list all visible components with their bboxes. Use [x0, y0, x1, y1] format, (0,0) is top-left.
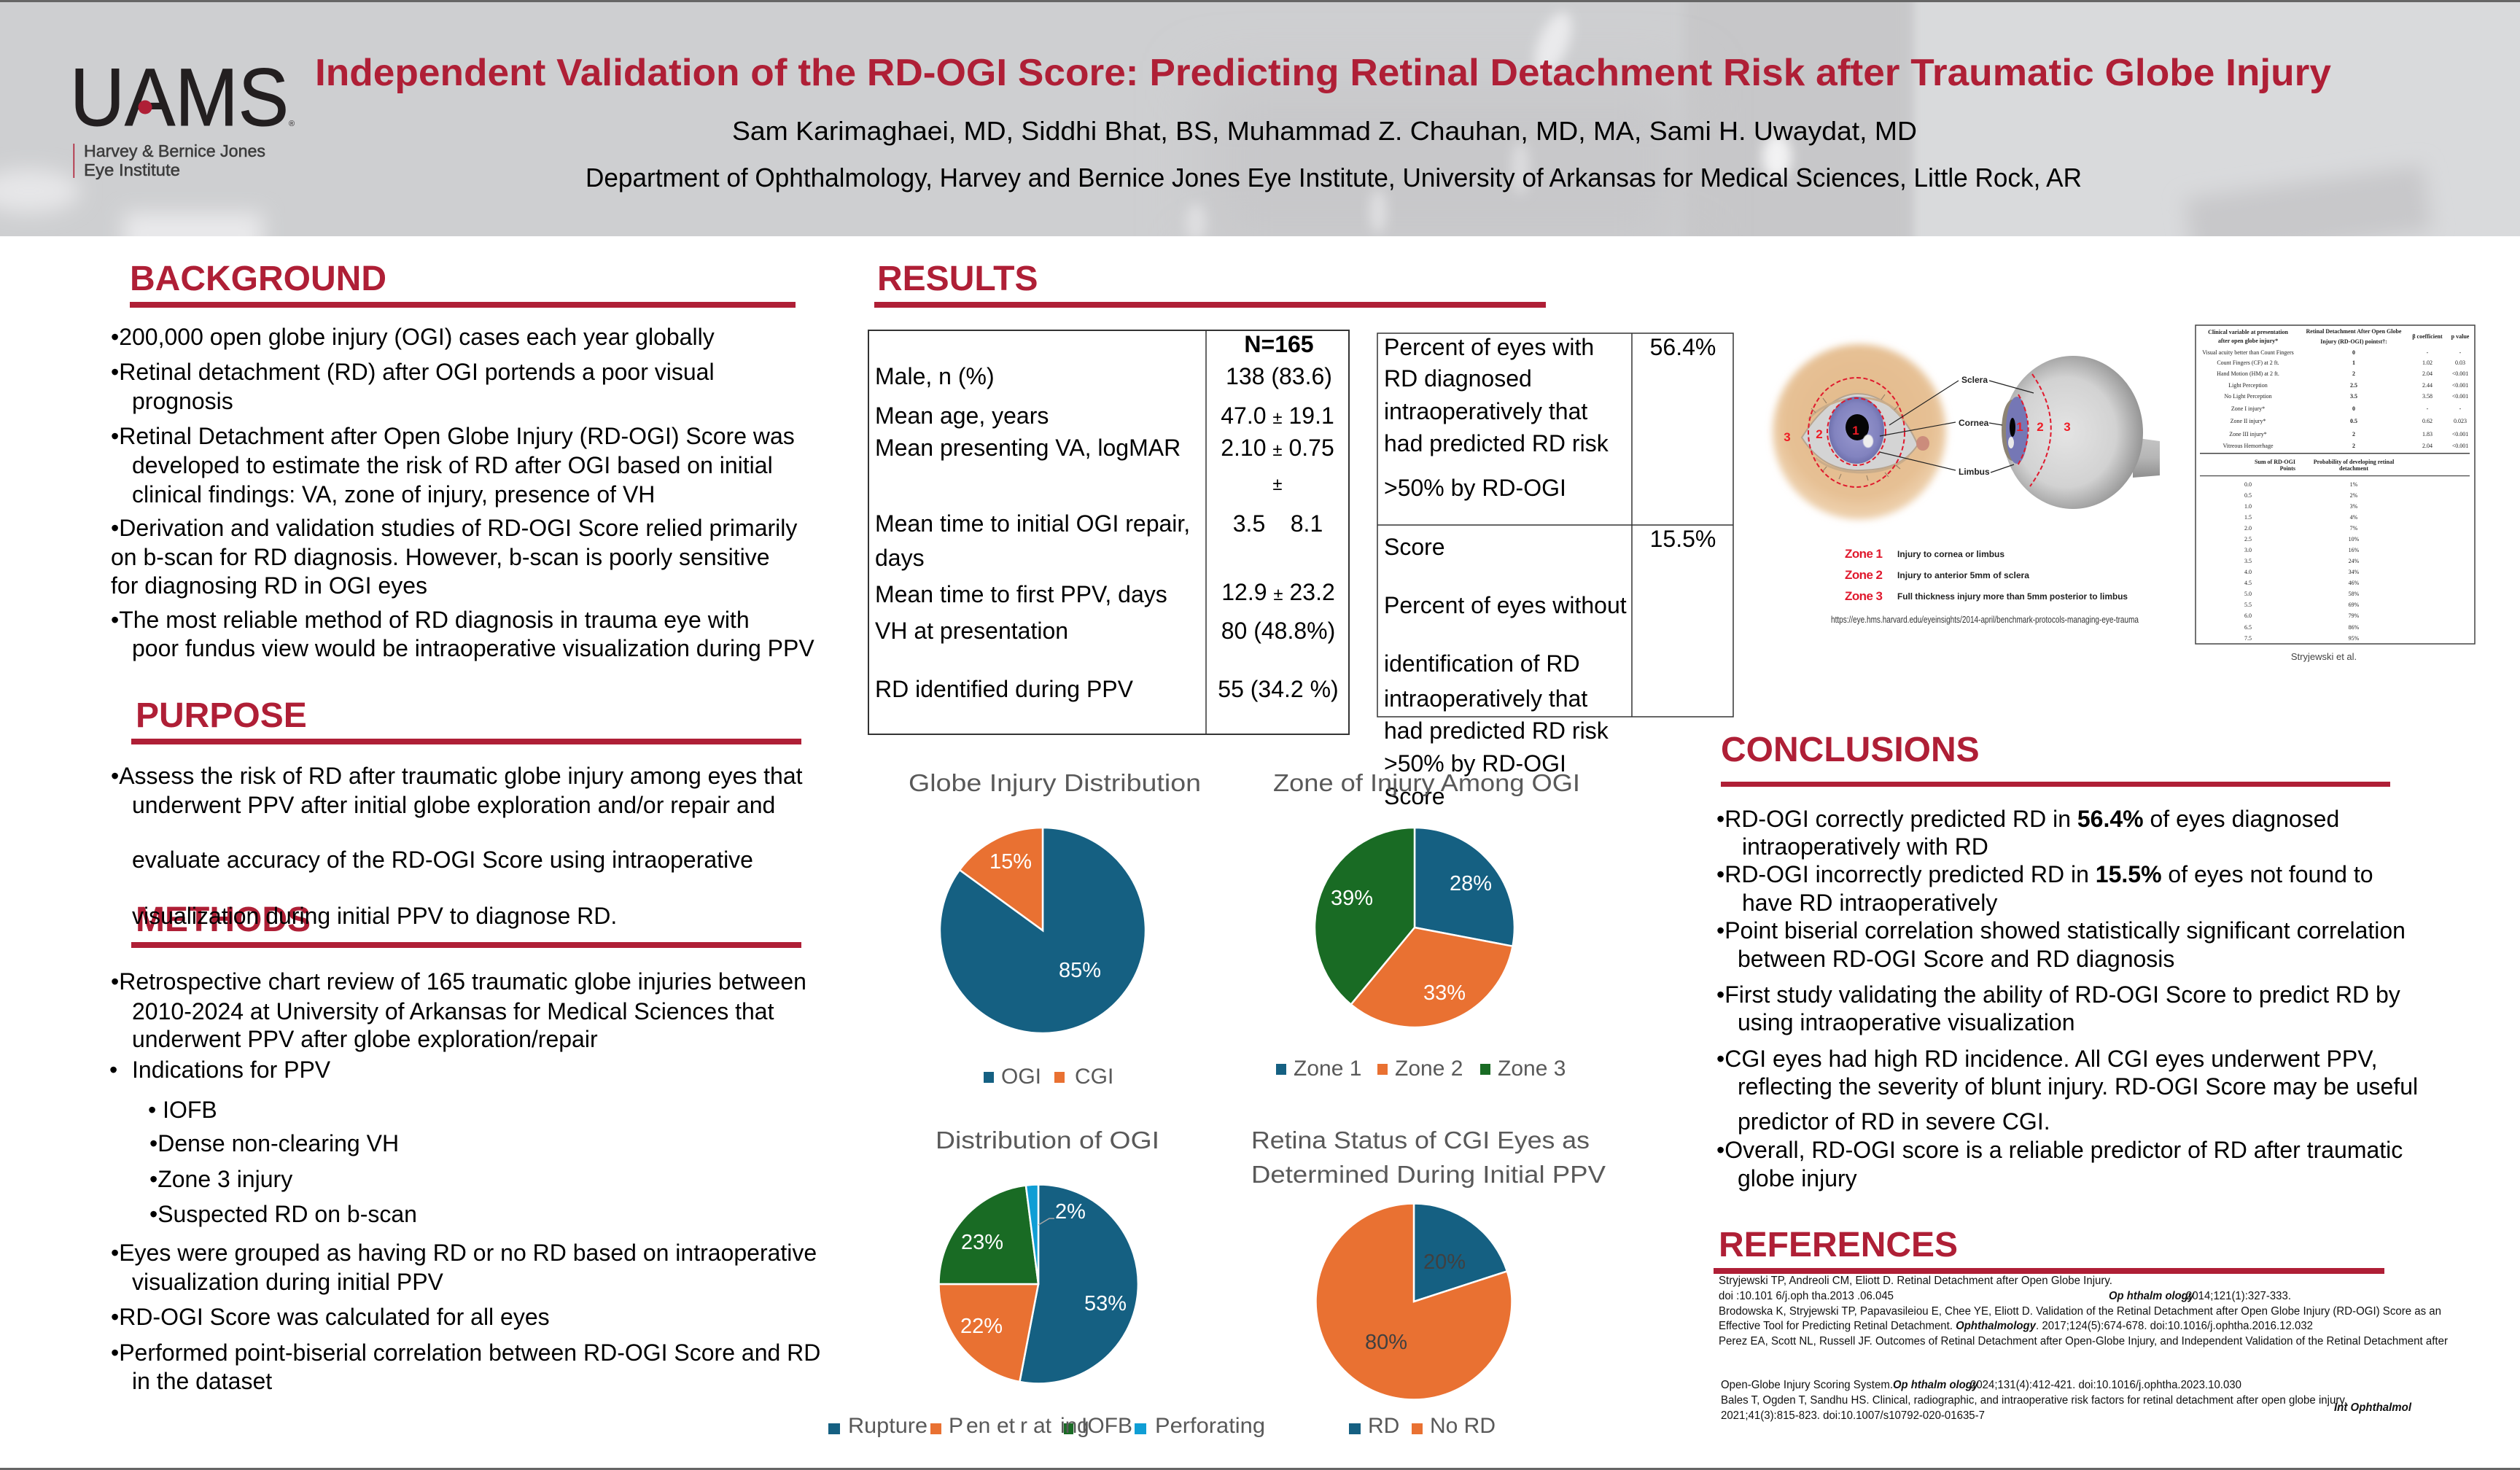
legend: RD — [1368, 1414, 1399, 1438]
table header: after open globe injury* — [2218, 338, 2278, 344]
table header: β coefficient — [2412, 333, 2443, 340]
pie chart: zone of injury: 28% — [1450, 872, 1492, 895]
table rows: probability: 0.0 — [2244, 481, 2252, 488]
pie chart: distribution of OGI: 2% — [1055, 1200, 1086, 1224]
conclusions bullet list: •RD-OGI incorrectly predicted RD in 15.5% of eyes not found to — [1716, 861, 2373, 887]
table rows: probability: 1% — [2350, 481, 2358, 488]
zone legend: Zone 1 — [1845, 547, 1883, 561]
figure: RD-OGI score table — [2196, 325, 2475, 662]
table rows: clinical variables: 3.58 — [2422, 393, 2432, 400]
table rows: probability: 7% — [2350, 525, 2358, 532]
table rows: clinical variables — [2202, 349, 2468, 449]
reference list: 2021;41(3):815-823. doi:10.1007/s10792-020-01635-7 — [1721, 1409, 1985, 1422]
table rows: clinical variables: Vitreous Hemorrhage — [2222, 443, 2274, 449]
heading: references: REFERENCES — [1719, 1226, 1958, 1264]
purpose bullet list — [111, 763, 803, 873]
conclusions bullet list: predictor of RD in severe CGI. — [1738, 1108, 2050, 1135]
heading: background: BACKGROUND — [130, 260, 386, 298]
table: score performance: 15.5% — [1650, 526, 1716, 552]
legend: at — [1033, 1414, 1052, 1438]
table rows: probability: 58% — [2349, 591, 2360, 597]
background bullet list: poor fundus view would be intraoperative visualization during PPV — [132, 635, 814, 661]
pie chart: retina status of CGI eyes: 80% — [1365, 1331, 1407, 1354]
zone legend: Injury to cornea or limbus — [1897, 549, 2004, 559]
purpose bullet list: •Assess the risk of RD after traumatic globe injury among eyes that — [111, 763, 803, 789]
affiliation: Department of Ophthalmology, Harvey and Bernice Jones Eye Institute, University of Arkansas for Medical Sciences, Little Rock, AR — [586, 163, 2082, 192]
table rows: probability: 24% — [2349, 558, 2360, 564]
table rows: probability: 4.5 — [2244, 580, 2252, 586]
table rows: probability: 46% — [2349, 580, 2360, 586]
background bullet list: for diagnosing RD in OGI eyes — [111, 572, 427, 599]
pie chart: zone of injury — [1273, 769, 1580, 1081]
table: patient characteristics: Mean time to initial OGI repair, — [875, 510, 1190, 537]
table header: Clinical variable at presentation — [2208, 329, 2288, 335]
reference list: Op hthalm ology — [2109, 1290, 2195, 1302]
reference list: Op hthalm ology — [1893, 1379, 1979, 1391]
institute name: Harvey & Bernice Jones — [84, 141, 265, 160]
institute name — [84, 141, 265, 179]
legend: en — [966, 1414, 990, 1438]
legend: Zone 2 — [1395, 1057, 1463, 1081]
table: patient characteristics: 47.0 ± 19.1 — [1221, 402, 1334, 429]
table rows: clinical variables: 1.02 — [2422, 359, 2432, 366]
background bullet list: •200,000 open globe injury (OGI) cases each year globally — [111, 324, 715, 350]
table rows: clinical variables: - — [2459, 405, 2462, 412]
table rows: clinical variables: 2.44 — [2422, 382, 2432, 389]
table rows: probability: 2.0 — [2244, 525, 2252, 532]
methods bullet list: underwent PPV after globe exploration/repair — [132, 1026, 598, 1052]
heading: purpose: PURPOSE — [136, 696, 307, 735]
table: score performance: intraoperatively that — [1384, 398, 1587, 424]
chart title: Distribution of OGI — [936, 1127, 1159, 1154]
legend: Perforating — [1155, 1414, 1265, 1438]
panel: results — [874, 260, 1546, 308]
table rows: probability: 4% — [2350, 514, 2358, 521]
pie chart: globe injury distribution — [909, 769, 1201, 1089]
table rows: probability: 6.5 — [2244, 624, 2252, 631]
table rows: probability: 16% — [2349, 547, 2360, 553]
table: patient characteristics: 12.9 ± 23.2 — [1221, 579, 1335, 605]
table rows: clinical variables: Hand Motion (HM) at 2 ft. — [2217, 370, 2279, 377]
chart title: Zone of Injury Among OGI — [1273, 769, 1580, 796]
background bullet list: prognosis — [132, 388, 233, 414]
methods bullet list — [109, 968, 820, 1394]
legend: No RD — [1430, 1414, 1496, 1438]
table rows: clinical variables: 2 — [2352, 443, 2355, 449]
table: patient characteristics: ± — [1272, 475, 1283, 494]
table rows: probability: 4.0 — [2244, 569, 2252, 575]
conclusions bullet list: intraoperatively with RD — [1742, 833, 1988, 860]
panel: purpose — [111, 696, 803, 873]
methods bullet list: 2010-2024 at University of Arkansas for Medical Sciences that — [132, 998, 774, 1024]
anatomy labels and leader lines — [1880, 375, 2034, 477]
table rows: clinical variables: 2 — [2352, 431, 2355, 438]
table: patient characteristics: 80 (48.8%) — [1221, 618, 1335, 644]
reference list — [1719, 1275, 2448, 1422]
table: patient characteristics: VH at presentation — [875, 618, 1068, 644]
pie chart: globe injury distribution: 15% — [989, 850, 1032, 874]
table rows: probability — [2244, 459, 2395, 642]
zone legend — [1845, 547, 2128, 603]
logo red dot — [139, 101, 152, 114]
anatomy labels and leader lines: Cornea — [1959, 418, 1989, 428]
methods bullet list: •RD-OGI Score was calculated for all eyes — [111, 1304, 550, 1330]
conclusions bullet list: between RD-OGI Score and RD diagnosis — [1738, 946, 2174, 972]
reference list: Int Ophthalmol — [2334, 1401, 2412, 1414]
table rows: clinical variables: <0.001 — [2452, 393, 2468, 400]
table rows: clinical variables: - — [2427, 405, 2429, 412]
pie chart: retina status of CGI eyes — [1251, 1127, 1606, 1438]
table rows: probability: Points — [2280, 465, 2295, 472]
chart title — [1251, 1127, 1606, 1188]
table rows: clinical variables: Visual acuity better than Count Fingers — [2202, 349, 2294, 356]
table: patient characteristics: Mean presenting VA, logMAR — [875, 435, 1181, 461]
institute name: Eye Institute — [84, 160, 180, 179]
conclusions bullet list: have RD intraoperatively — [1742, 890, 1997, 916]
table: score performance: intraoperatively that — [1384, 685, 1587, 712]
zone legend: Zone 3 — [1845, 589, 1883, 603]
table rows: clinical variables: 0 — [2352, 349, 2355, 356]
methods bullet list: •Performed point-biserial correlation between RD-OGI Score and RD — [111, 1339, 820, 1366]
table header — [2208, 328, 2470, 345]
table: patient characteristics: 2.10 ± 0.75 — [1221, 435, 1334, 461]
pie chart: distribution of OGI: 22% — [960, 1315, 1003, 1338]
methods bullet list: in the dataset — [132, 1368, 272, 1394]
table rows: clinical variables: Zone I injury* — [2231, 405, 2265, 412]
table rows: clinical variables: 0.03 — [2455, 359, 2465, 366]
table: patient characteristics: Mean time to first PPV, days — [875, 581, 1167, 607]
illustration: front view of eye: 2 — [1816, 427, 1823, 441]
table: patient characteristics: 55 (34.2 %) — [1218, 676, 1339, 702]
zone legend: Zone 2 — [1845, 568, 1883, 582]
table rows: clinical variables: 2 — [2352, 370, 2355, 377]
purpose bullet list: underwent PPV after initial globe exploration and/or repair and — [132, 792, 775, 818]
table: patient characteristics: RD identified during PPV — [875, 676, 1134, 702]
table rows: probability: 79% — [2349, 612, 2360, 619]
table rows: clinical variables: 2.04 — [2422, 443, 2432, 449]
legend: Rupture — [848, 1414, 928, 1438]
table: score performance: Percent of eyes with — [1384, 334, 1594, 360]
illustration: side view of globe: 1 — [2016, 420, 2023, 434]
legend: OGI — [1001, 1065, 1041, 1089]
table rows: probability: 10% — [2349, 536, 2360, 542]
methods bullet list: • IOFB — [148, 1097, 217, 1123]
legend — [828, 1414, 1265, 1438]
illustration: side view of globe: 3 — [2064, 420, 2071, 434]
chart title: Globe Injury Distribution — [909, 769, 1201, 796]
table rows: probability: 3.0 — [2244, 547, 2252, 553]
pie chart: globe injury distribution: 85% — [1059, 959, 1101, 982]
table rows: clinical variables: Zone III injury* — [2229, 431, 2267, 438]
table: patient characteristics: 3.5 — [1233, 510, 1265, 537]
reference list: Bales T, Ogden T, Sandhu HS. Clinical, radiographic, and intraoperative risk factors for retinal detachment after open globe injury. — [1721, 1394, 2347, 1407]
anatomy labels and leader lines: Limbus — [1959, 467, 1990, 477]
logo: UAMS Harvey & Bernice Jones Eye Institute: ® — [289, 120, 295, 128]
table rows: clinical variables: 0.62 — [2422, 418, 2432, 424]
legend — [1276, 1057, 1566, 1081]
legend: IOFB — [1081, 1414, 1132, 1438]
table rows: clinical variables: 1 — [2352, 359, 2355, 366]
pie chart: zone of injury: 39% — [1331, 887, 1373, 910]
table rows: clinical variables: 2.04 — [2422, 370, 2432, 377]
table: patient characteristics — [868, 330, 1349, 734]
pie chart: distribution of OGI: 53% — [1084, 1292, 1127, 1315]
conclusions bullet list: •Overall, RD-OGI score is a reliable predictor of RD after traumatic — [1716, 1137, 2403, 1163]
panel: references — [1714, 1226, 2448, 1422]
table: patient characteristics: days — [875, 545, 925, 571]
panel: methods — [109, 901, 820, 1394]
figure: ocular injury zones — [1773, 344, 2160, 625]
chart title: Determined During Initial PPV — [1251, 1161, 1606, 1188]
pie chart: zone of injury: 33% — [1423, 981, 1466, 1005]
legend: Zone 1 — [1294, 1057, 1361, 1081]
anatomy labels and leader lines: Sclera — [1961, 375, 1988, 385]
heading: conclusions: CONCLUSIONS — [1721, 731, 1980, 769]
pie slices — [940, 828, 1146, 1033]
table: score performance: Score — [1384, 534, 1445, 560]
table rows: probability: 1.0 — [2244, 503, 2252, 510]
legend: r — [1020, 1414, 1027, 1438]
table: score performance: RD diagnosed — [1384, 365, 1532, 392]
conclusions bullet list: •CGI eyes had high RD incidence. All CGI eyes underwent PPV, — [1716, 1046, 2377, 1072]
table: score performance: had predicted RD risk — [1384, 718, 1609, 744]
legend: g — [1077, 1414, 1089, 1438]
illustration: front view of eye — [1773, 344, 1946, 519]
legend — [984, 1065, 1113, 1089]
table rows: clinical variables: 0 — [2352, 405, 2355, 412]
table: score performance — [1377, 333, 1733, 809]
background bullet list: •Derivation and validation studies of RD-OGI Score relied primarily — [111, 515, 797, 541]
reference list: Perez EA, Scott NL, Russell JF. Outcomes of Retinal Detachment after Open-Globe Injury, and Independent Validation of the Retinal Detachment after — [1719, 1335, 2448, 1348]
table rows: clinical variables: 0.023 — [2454, 418, 2467, 424]
table rows: probability: Sum of RD-OGI — [2255, 459, 2295, 465]
UAMS wordmark: UAMS — [70, 52, 289, 143]
background bullet list — [111, 324, 814, 661]
background bullet list: clinical findings: VA, zone of injury, presence of VH — [132, 481, 655, 508]
pie chart: distribution of OGI — [828, 1127, 1265, 1438]
conclusions bullet list — [1716, 806, 2418, 1191]
table rows: probability: 3.5 — [2244, 558, 2252, 564]
table rows: clinical variables: 3.5 — [2350, 393, 2357, 400]
legend: et — [997, 1414, 1016, 1438]
reference list: Stryjewski TP, Andreoli CM, Eliott D. Retinal Detachment after Open Globe Injury. — [1719, 1275, 2112, 1287]
table rows: clinical variables: <0.001 — [2452, 431, 2468, 438]
table rows: clinical variables: - — [2427, 349, 2429, 356]
table header: p value — [2451, 333, 2470, 340]
table rows: clinical variables: <0.001 — [2452, 443, 2468, 449]
table rows: clinical variables: 0.5 — [2350, 418, 2357, 424]
table rows: probability: 86% — [2349, 624, 2360, 631]
table rows: probability: 95% — [2349, 635, 2360, 642]
table header: Injury (RD-OGI) pointst†: — [2320, 338, 2387, 345]
table rows: clinical variables: No Light Perception — [2224, 393, 2272, 400]
leader line — [1038, 1218, 1054, 1225]
table rows: probability: 69% — [2349, 602, 2360, 608]
pie chart: distribution of OGI: 23% — [961, 1231, 1003, 1254]
panel: methods: visualization during initial PPV to diagnose RD. — [132, 903, 617, 929]
table rows: probability: 34% — [2349, 569, 2360, 575]
table rows: clinical variables: <0.001 — [2452, 382, 2468, 389]
logo red divider — [73, 144, 74, 178]
table rows: probability: 2.5 — [2244, 536, 2252, 542]
authors: Sam Karimaghaei, MD, Siddhi Bhat, BS, Muhammad Z. Chauhan, MD, MA, Sami H. Uwaydat, MD — [732, 116, 1917, 146]
table rows: probability: 5.5 — [2244, 602, 2252, 608]
header banner — [0, 0, 2520, 236]
table rows: probability: 1.5 — [2244, 514, 2252, 521]
table rows: clinical variables: Light Perception — [2228, 382, 2268, 389]
methods bullet list: • — [109, 1057, 117, 1083]
table rows: probability: 0.5 — [2244, 492, 2252, 499]
table header: Retinal Detachment After Open Globe — [2306, 328, 2402, 335]
zone legend: Injury to anterior 5mm of sclera — [1897, 570, 2029, 580]
table rows: probability: 2% — [2350, 492, 2358, 499]
heading: results: RESULTS — [877, 260, 1038, 298]
table rows: clinical variables: - — [2459, 349, 2462, 356]
conclusions bullet list: •RD-OGI correctly predicted RD in 56.4% of eyes diagnosed — [1716, 806, 2339, 832]
methods bullet list: •Zone 3 injury — [149, 1166, 292, 1192]
panel: background — [111, 260, 814, 661]
table rows: clinical variables: Zone II injury* — [2231, 418, 2266, 424]
source caption: Stryjewski et al. — [2291, 651, 2357, 662]
legend — [1349, 1414, 1496, 1438]
logo: UAMS Harvey & Bernice Jones Eye Institute — [70, 52, 295, 179]
reference list: doi :10.101 6/j.oph tha.2013 .06.045 — [1719, 1290, 1894, 1302]
methods bullet list: Indications for PPV — [132, 1057, 331, 1083]
conclusions bullet list: globe injury — [1738, 1165, 1857, 1191]
reference list: Open-Globe Injury Scoring System. — [1721, 1379, 1893, 1391]
table rows: probability: 7.5 — [2244, 635, 2252, 642]
heading: methods: METHODS — [136, 901, 311, 939]
illustration: front view of eye: 1 — [1852, 424, 1859, 438]
purpose bullet list: evaluate accuracy of the RD-OGI Score using intraoperative — [132, 847, 753, 873]
reference list: Effective Tool for Predicting Retinal Detachment. Ophthalmology. 2017;124(5):674-678. doi:10.1016/j.ophtha.2016.12.032 — [1719, 1320, 2313, 1332]
reference list: 2024;131(4):412-421. doi:10.1016/j.ophtha.2023.10.030 — [1970, 1379, 2241, 1391]
pie chart: retina status of CGI eyes: 20% — [1423, 1251, 1466, 1274]
illustration: side view of globe — [2002, 356, 2160, 509]
background bullet list: developed to estimate the risk of RD after OGI based on initial — [132, 452, 773, 478]
background bullet list: •Retinal Detachment after Open Globe Injury (RD-OGI) Score was — [111, 423, 795, 449]
chart title: Retina Status of CGI Eyes as — [1251, 1127, 1590, 1154]
legend: in — [1060, 1414, 1077, 1438]
conclusions bullet list: using intraoperative visualization — [1738, 1009, 2074, 1035]
zone legend: Full thickness injury more than 5mm posterior to limbus — [1897, 591, 2128, 602]
panel: conclusions — [1716, 731, 2418, 1191]
table: score performance: Score — [1384, 783, 1445, 809]
background bullet list: •Retinal detachment (RD) after OGI portends a poor visual — [111, 359, 715, 385]
legend: CGI — [1075, 1065, 1113, 1089]
table rows: probability: 5.0 — [2244, 591, 2252, 597]
pie slices — [1315, 828, 1514, 1027]
background bullet list: on b-scan for RD diagnosis. However, b-scan is poorly sensitive — [111, 544, 770, 570]
table: patient characteristics: Male, n (%) — [875, 363, 995, 389]
table rows: probability: Probability of developing retinal — [2314, 459, 2395, 465]
reference list: Brodowska K, Stryjewski TP, Papavasileiou E, Chee YE, Eliott D. Validation of the Retinal Detachment after Open Globe Injury (RD-OGI) Score as an — [1719, 1305, 2441, 1318]
table rows: clinical variables: Count Fingers (CF) at 2 ft. — [2217, 359, 2279, 366]
illustration: side view of globe: 2 — [2037, 420, 2044, 434]
table rows: probability: detachment — [2339, 465, 2368, 472]
legend: P — [949, 1414, 963, 1438]
background bullet list: •The most reliable method of RD diagnosis in trauma eye with — [111, 607, 750, 633]
methods bullet list: •Retrospective chart review of 165 traumatic globe injuries between — [111, 968, 806, 995]
bottom border — [0, 1468, 2520, 1470]
source url: https://eye.hms.harvard.edu/eyeinsights/2014-april/benchmark-protocols-managing-eye-trauma — [1831, 614, 2139, 625]
reference list: 2014;121(1):327-333. — [2186, 1290, 2291, 1302]
methods bullet list: •Eyes were grouped as having RD or no RD based on intraoperative — [111, 1240, 817, 1266]
methods bullet list: visualization during initial PPV — [132, 1269, 444, 1295]
table: score performance: had predicted RD risk — [1384, 430, 1609, 456]
table: patient characteristics: N=165 — [1244, 331, 1314, 357]
table: patient characteristics: Mean age, years — [875, 402, 1049, 429]
table rows: probability: 6.0 — [2244, 612, 2252, 619]
table: score performance: identification of RD — [1384, 650, 1580, 677]
legend: Zone 3 — [1498, 1057, 1566, 1081]
table: score performance: >50% by RD-OGI — [1384, 750, 1566, 777]
table rows: clinical variables: 1.83 — [2422, 431, 2432, 438]
table: patient characteristics: 8.1 — [1291, 510, 1323, 537]
conclusions bullet list: •Point biserial correlation showed statistically significant correlation — [1716, 917, 2406, 944]
illustration: front view of eye: 3 — [1784, 430, 1791, 444]
methods bullet list: •Dense non-clearing VH — [149, 1130, 399, 1156]
conclusions bullet list: reflecting the severity of blunt injury. RD-OGI Score may be useful — [1738, 1073, 2418, 1100]
table rows: probability: 3% — [2350, 503, 2358, 510]
table: score performance: Percent of eyes without — [1384, 592, 1627, 618]
title: Independent Validation of the RD-OGI Score: Predicting Retinal Detachment Risk after Traumatic Globe Injury — [315, 52, 2331, 94]
table: score performance: 56.4% — [1650, 334, 1716, 360]
table: score performance: >50% by RD-OGI — [1384, 475, 1566, 501]
pie slices — [1315, 1203, 1512, 1400]
pie slices — [939, 1184, 1138, 1383]
methods bullet list: •Suspected RD on b-scan — [149, 1201, 417, 1227]
table: patient characteristics: 138 (83.6) — [1226, 363, 1332, 389]
conclusions bullet list: •First study validating the ability of RD-OGI Score to predict RD by — [1716, 981, 2400, 1008]
table rows: clinical variables: <0.001 — [2452, 370, 2468, 377]
table rows: clinical variables: 2.5 — [2350, 382, 2357, 389]
